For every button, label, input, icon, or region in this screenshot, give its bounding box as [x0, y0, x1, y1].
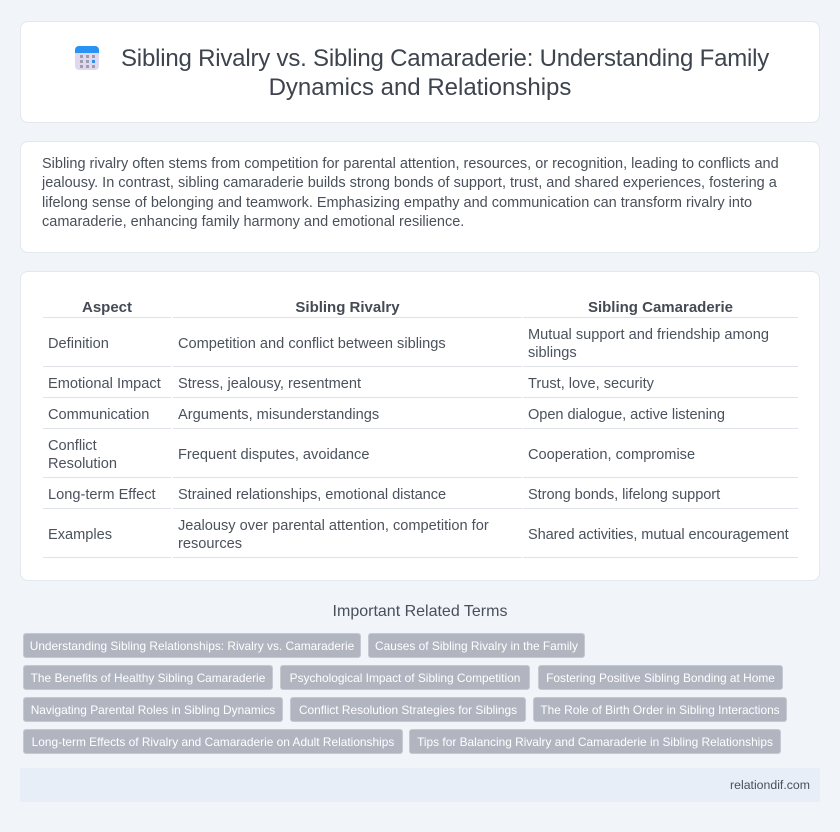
- intro text: jealousy. In contrast, sibling camaraderie builds strong bonds of support, trust, and shared experiences, fostering a: [42, 175, 777, 191]
- comparison table: Jealousy over parental attention, competition for: [178, 518, 489, 534]
- comparison table: Trust, love, security: [528, 376, 654, 392]
- comparison table: siblings: [528, 345, 577, 361]
- title card: [20, 21, 820, 123]
- tag row 4: Long-term Effects of Rivalry and Camaraderie on Adult Relationships: [32, 735, 394, 749]
- intro text: lifelong sense of belonging and teamwork. Emphasizing empathy and communication can transform rivalry into: [42, 195, 752, 211]
- table header: Aspect: [82, 299, 132, 316]
- intro text: [42, 156, 779, 230]
- footer credit: relationdif.com: [730, 778, 810, 792]
- table card: [20, 271, 820, 581]
- comparison table: [43, 299, 798, 558]
- related terms tags: Causes of Sibling Rivalry in the Family: [375, 639, 578, 653]
- intro text: Sibling rivalry often stems from competition for parental attention, resources, or recognition, leading to conflicts and: [42, 156, 779, 172]
- related terms tags: The Role of Birth Order in Sibling Interactions: [540, 703, 780, 717]
- comparison table: Arguments, misunderstandings: [178, 407, 379, 423]
- intro card: [20, 141, 820, 253]
- comparison table: Strained relationships, emotional distance: [178, 487, 446, 503]
- comparison table: resources: [178, 536, 242, 552]
- title: Dynamics and Relationships: [269, 74, 571, 101]
- title: [121, 45, 770, 101]
- row: conflict resolution: [48, 438, 117, 472]
- intro text: camaraderie, enhancing family harmony and emotional resilience.: [42, 214, 464, 230]
- related terms tags: Psychological Impact of Sibling Competition: [290, 671, 520, 685]
- tag row 3: Navigating Parental Roles in Sibling Dynamics: [31, 703, 275, 717]
- related terms tags: Fostering Positive Sibling Bonding at Home: [546, 671, 775, 685]
- related terms tags: Tips for Balancing Rivalry and Camaraderie in Sibling Relationships: [417, 735, 773, 749]
- tag row 2: The Benefits of Healthy Sibling Camaraderie: [31, 671, 265, 685]
- title: Sibling Rivalry vs. Sibling Camaraderie: Understanding Family: [121, 45, 769, 72]
- comparison table: Sibling Rivalry: [295, 299, 400, 316]
- related terms tags: [23, 633, 787, 754]
- comparison table: Open dialogue, active listening: [528, 407, 725, 423]
- comparison table: Cooperation, compromise: [528, 447, 695, 463]
- comparison table: Mutual support and friendship among: [528, 327, 769, 343]
- tag row 2: [23, 665, 273, 690]
- comparison table: Stress, jealousy, resentment: [178, 376, 361, 392]
- tag row 4: [23, 729, 403, 754]
- comparison table: Shared activities, mutual encouragement: [528, 527, 789, 543]
- comparison table: Strong bonds, lifelong support: [528, 487, 720, 503]
- row: long-term effect: Long-term Effect: [48, 487, 156, 503]
- row: examples: Examples: [48, 527, 112, 543]
- row: conflict resolution: Resolution: [48, 456, 117, 472]
- related terms tags: Conflict Resolution Strategies for Siblings: [299, 703, 517, 717]
- row: definition: Definition: [48, 336, 109, 352]
- row: emotional impact: Emotional Impact: [48, 376, 161, 392]
- tag row 1: [23, 633, 361, 658]
- row: conflict resolution: Conflict: [48, 438, 97, 454]
- footer bar: [20, 768, 820, 802]
- tag row 3: [23, 697, 283, 722]
- comparison table: Frequent disputes, avoidance: [178, 447, 369, 463]
- related terms heading: Important Related Terms: [333, 603, 507, 620]
- tag row 1: Understanding Sibling Relationships: Rivalry vs. Camaraderie: [30, 639, 354, 653]
- comparison table: Sibling Camaraderie: [588, 299, 733, 316]
- row: communication: Communication: [48, 407, 149, 423]
- comparison table: Competition and conflict between siblings: [178, 336, 446, 352]
- icon: calendar: [75, 46, 99, 70]
